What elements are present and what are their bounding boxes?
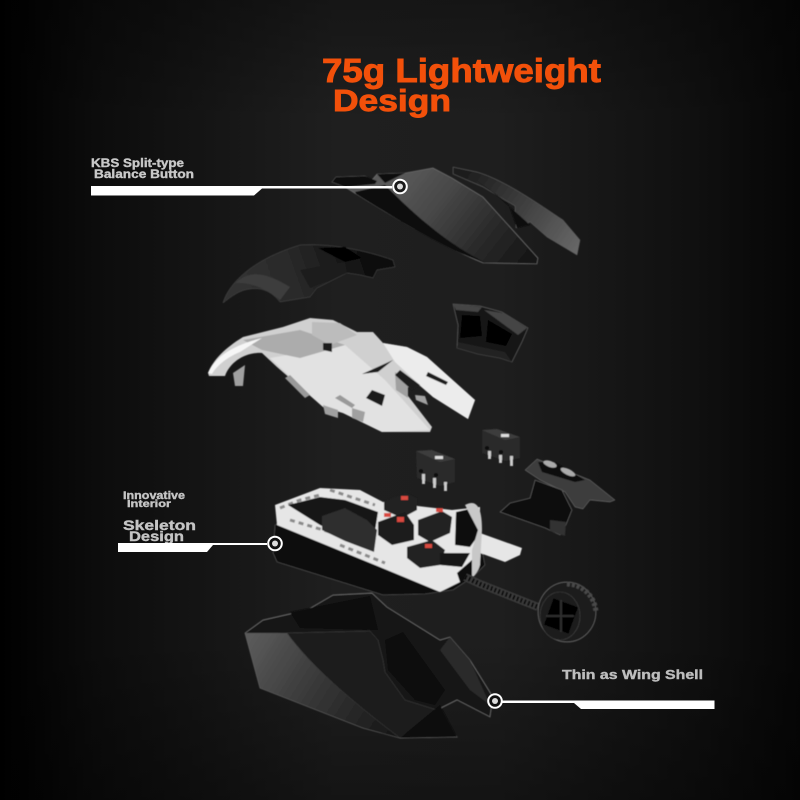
callout: innovative interior skeleton design: Design (129, 528, 184, 544)
callout: innovative interior skeleton design (118, 490, 282, 552)
callout: KBS split-type balance button (91, 156, 407, 196)
callout: innovative interior skeleton design: Interior (127, 499, 171, 510)
callout: KBS split-type balance button: Balance Button (94, 167, 194, 181)
title (322, 52, 601, 118)
callout: innovative interior skeleton design: Innovative (123, 490, 185, 502)
exploded part: left button dome (223, 245, 395, 303)
lower body (273, 510, 485, 595)
lower wing shell (245, 593, 493, 738)
callout: innovative interior skeleton design: Skeleton (123, 517, 196, 533)
exploded part: white skeleton frame (208, 318, 475, 432)
cable and roller (465, 577, 596, 642)
exploded part: side bracket (453, 304, 528, 362)
exploded part: top shell (332, 167, 580, 264)
title: 75g Lightweight (322, 52, 601, 89)
microswitch: right (482, 429, 520, 466)
scroll wheel ring (465, 503, 482, 578)
PCB (275, 488, 522, 592)
circuit board with switches (273, 488, 522, 595)
side button assembly (500, 459, 615, 536)
callout: thin as wing shell: Thin as Wing Shell (562, 667, 703, 682)
callout: thin as wing shell (488, 667, 714, 709)
title: Design (333, 83, 451, 118)
callout: KBS split-type balance button: KBS Split-type (91, 156, 184, 170)
microswitch: left (416, 450, 455, 491)
